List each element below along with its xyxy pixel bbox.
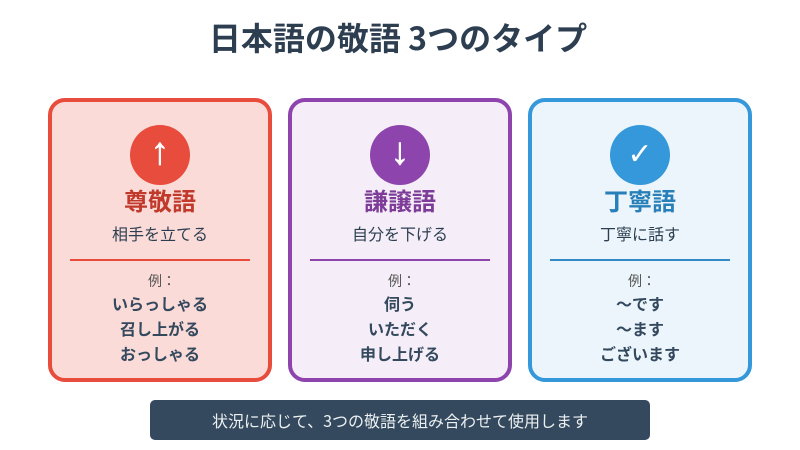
heading: 謙譲語: 謙譲語 (364, 182, 436, 217)
examples: 申し上げる (360, 341, 440, 365)
examples (360, 271, 440, 365)
icon: down arrow: ↓ (390, 131, 410, 173)
icon: check mark: ✓ (627, 137, 653, 172)
description: 相手を立てる (112, 221, 208, 245)
icon: check mark (610, 125, 670, 185)
title: 日本語の敬語 3つのタイプ (209, 14, 587, 60)
examples: ～ます (616, 316, 664, 340)
examples: 例： (388, 271, 416, 291)
examples: いただく (368, 316, 432, 340)
description: 丁寧に話す (600, 221, 680, 245)
examples: 伺う (384, 291, 416, 315)
description: 自分を下げる (352, 221, 448, 245)
footer banner (150, 400, 650, 440)
examples (112, 271, 208, 365)
panel: 謙譲語 (290, 100, 510, 380)
examples: おっしゃる (120, 341, 200, 365)
examples: ございます (600, 341, 680, 365)
examples: 例： (148, 271, 176, 291)
card background (530, 100, 750, 380)
heading: 尊敬語: 尊敬語 (124, 182, 196, 217)
footer banner: 状況に応じて、3つの敬語を組み合わせて使用します (212, 408, 588, 432)
icon: up arrow: ↑ (150, 131, 170, 173)
card background (290, 100, 510, 380)
panel: 丁寧語 (530, 100, 750, 380)
examples (600, 271, 680, 365)
examples: 召し上がる (120, 316, 200, 340)
panel: 尊敬語 (50, 100, 270, 380)
icon: up arrow (130, 125, 190, 185)
examples: ～です (616, 291, 664, 315)
card background (50, 100, 270, 380)
icon: down arrow (370, 125, 430, 185)
heading: 丁寧語: 丁寧語 (604, 182, 676, 217)
examples: 例： (628, 271, 656, 291)
examples: いらっしゃる (112, 291, 208, 315)
